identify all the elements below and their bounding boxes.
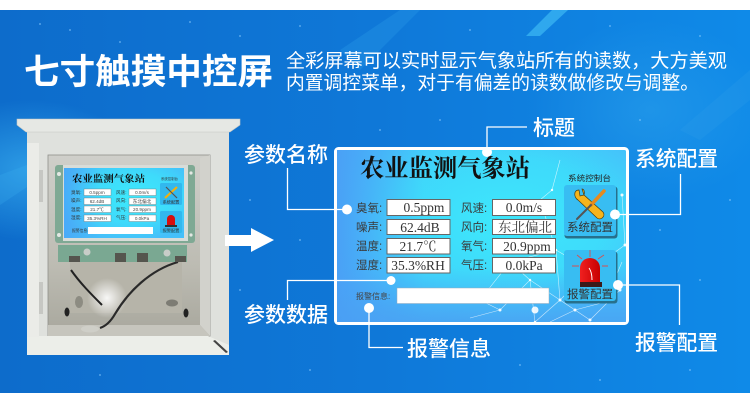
miniature touch screen: 东北偏北	[133, 198, 152, 205]
alarm info row	[356, 288, 549, 304]
terminal board	[58, 245, 187, 262]
miniature touch screen: 农业监测气象站	[71, 172, 145, 185]
parameter rows left	[356, 200, 450, 273]
parameter rows left: 温度:	[356, 239, 382, 253]
parameter rows right: 20.9ppm	[503, 239, 551, 254]
cable left	[71, 270, 102, 305]
parameter rows left: 62.4dB	[400, 220, 440, 235]
callout: alarm config: 报警配置	[635, 332, 718, 355]
miniature touch screen: 湿度:	[71, 214, 81, 221]
parameter rows right: 风向:	[461, 220, 487, 234]
miniature touch screen: 风向:	[116, 197, 126, 204]
callout: alarm info	[364, 303, 491, 361]
miniature touch screen: 噪声:	[71, 197, 81, 204]
system control label: 系统控制台	[568, 173, 611, 183]
door edge	[27, 143, 39, 337]
description text: 全彩屏幕可以实时显示气象站所有的读数，大方美观	[286, 50, 727, 72]
parameter rows right: 气压:	[461, 258, 487, 272]
miniature touch screen: 报警信息:	[72, 228, 88, 233]
button: system config: 系统配置	[567, 221, 613, 234]
callout: system config: 系统配置	[635, 148, 718, 171]
miniature touch screen: 温度:	[71, 206, 81, 213]
miniature touch screen: 0.0kPa	[135, 216, 150, 221]
miniature touch screen: 气压:	[116, 214, 126, 221]
callout: alarm config	[613, 280, 718, 355]
parameter rows right: 风速:	[461, 202, 487, 215]
miniature touch screen: 氧气:	[116, 206, 126, 213]
miniature touch screen: 臭氧:	[71, 189, 81, 196]
display board	[55, 165, 195, 243]
callout: parameter name: 参数名称	[244, 144, 328, 167]
parameter rows left: 噪声:	[356, 220, 382, 234]
callout: title	[482, 117, 575, 157]
miniature touch screen: 35.3%RH	[87, 216, 107, 221]
inner cavity	[48, 155, 210, 336]
parameter rows left: 臭氧:	[356, 201, 382, 215]
button: system config	[564, 185, 618, 238]
callout: alarm info: 报警信息	[407, 338, 491, 361]
miniature touch screen: 0.0m/s	[135, 190, 150, 195]
box body	[27, 125, 229, 355]
miniature touch screen: 0.5ppm	[89, 190, 105, 195]
miniature touch screen: 20.9ppm	[133, 207, 151, 212]
parameter rows left: 21.7℃	[399, 239, 437, 254]
bottom lip	[27, 336, 229, 355]
parameter rows right: 氧气:	[461, 239, 487, 253]
cable right	[100, 262, 178, 328]
parameter rows left: 35.3%RH	[391, 258, 445, 273]
alarm info row: 报警信息:	[356, 291, 390, 301]
heading: seven inch touch control screen: 七寸触摸中控屏	[24, 52, 273, 92]
screen title: 农业监测气象站	[359, 154, 530, 182]
parameter rows right: 0.0m/s	[506, 200, 542, 215]
button: alarm config: 报警配置	[567, 287, 613, 301]
callout: system config	[610, 148, 718, 220]
description text	[286, 50, 727, 94]
callout: parameter data: 参数数据	[244, 304, 328, 327]
parameter rows left: 湿度:	[356, 258, 382, 272]
parameter rows left: 0.5ppm	[404, 200, 445, 215]
miniature touch screen: 62.4dB	[90, 199, 104, 204]
callout: parameter data	[244, 276, 396, 327]
network pattern	[470, 160, 626, 323]
miniature touch screen: 21.7℃	[90, 207, 104, 212]
parameter rows right: 东北偏北	[498, 219, 552, 235]
arrow: box to screen	[225, 228, 274, 252]
box lid	[17, 119, 240, 132]
mounting plate	[70, 262, 182, 313]
miniature touch screen	[64, 168, 184, 238]
panel: touch screen detail	[336, 148, 628, 324]
miniature touch screen: 系统配置	[163, 198, 179, 206]
screwdriver	[591, 191, 604, 205]
parameter rows right	[461, 200, 556, 273]
button: alarm config	[564, 250, 618, 304]
photo: open control box	[17, 119, 240, 355]
miniature touch screen: 风速:	[116, 190, 126, 196]
callout: title: 标题	[533, 117, 575, 140]
miniature touch screen: 报警配置	[163, 227, 179, 234]
parameter rows right: 0.0kPa	[505, 258, 543, 273]
description text: 内置调控菜单，对于有偏差的读数做修改与调整。	[286, 72, 699, 94]
miniature touch screen: 系统控制台	[161, 176, 179, 181]
wrench	[575, 189, 604, 219]
callout: parameter name	[244, 144, 352, 214]
